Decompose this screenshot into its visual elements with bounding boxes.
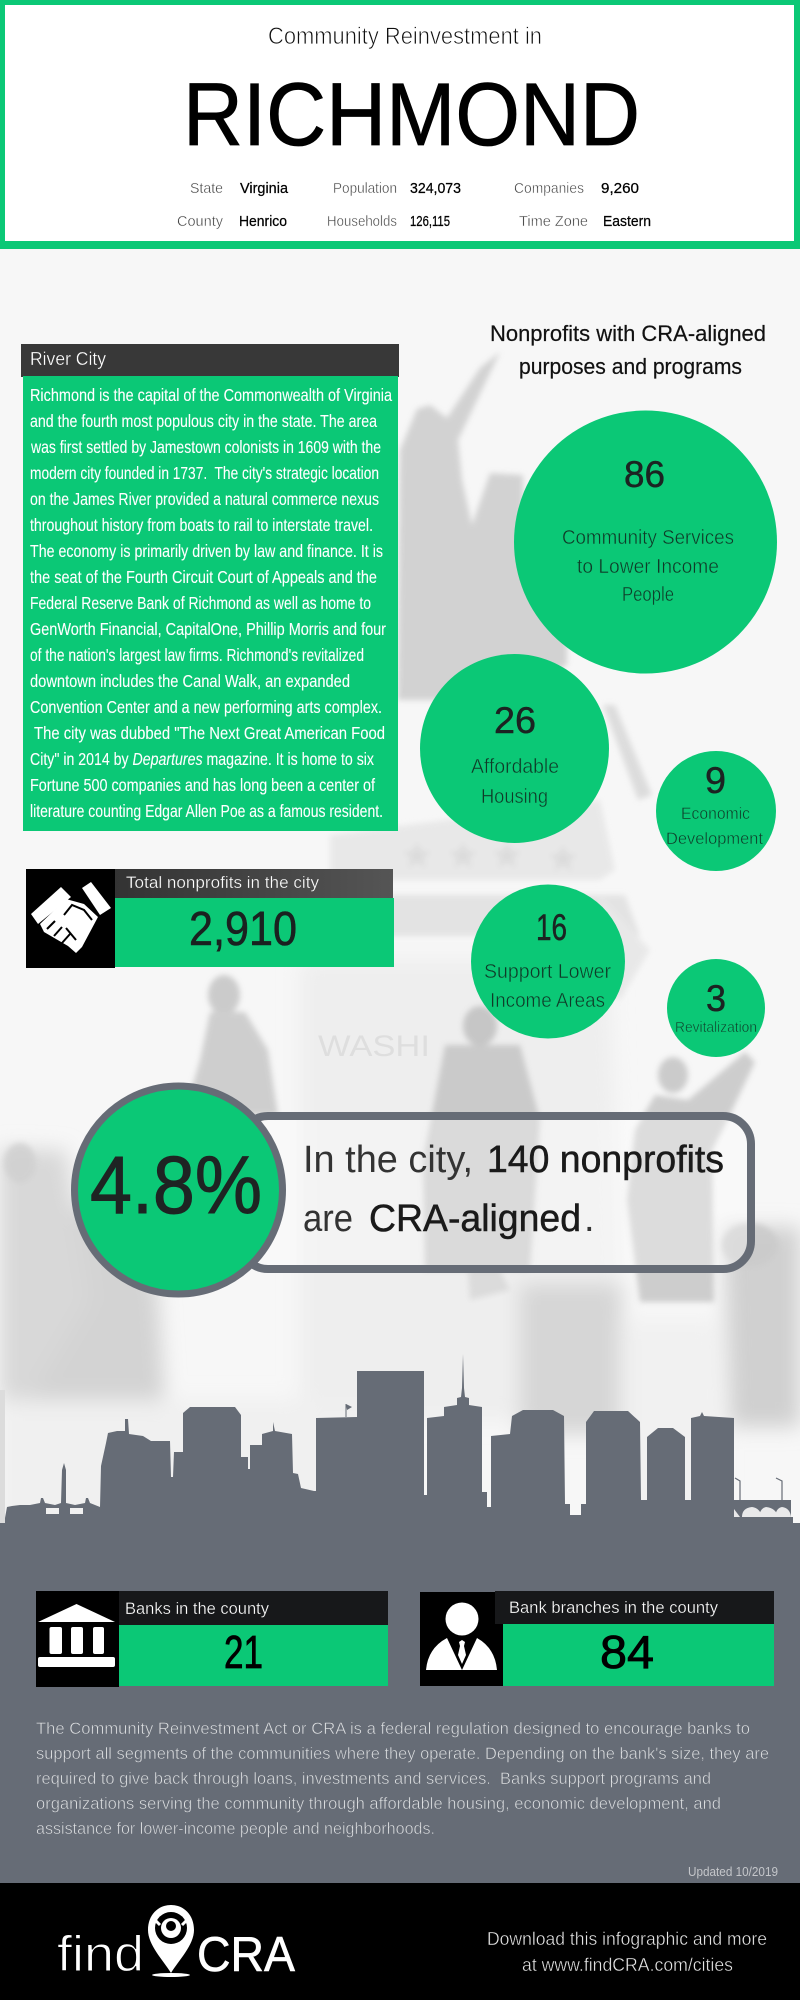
River City body text: The economy is primarily driven by law and finance. It is	[30, 541, 383, 561]
circle: community services: Community Services	[562, 527, 734, 549]
circle: revitalization: Revitalization	[675, 1019, 757, 1036]
stars	[403, 842, 577, 871]
callout text: In the city,	[303, 1139, 473, 1181]
bridge arches and colonnade	[46, 1507, 791, 1517]
background photo: monument statues: WASHI	[318, 1030, 430, 1063]
River City body text: modern city founded in 1737. The city's strategic location	[30, 463, 379, 483]
River City body text: Federal Reserve Bank of Richmond as well as home to	[30, 593, 371, 613]
city stats: 9,260	[601, 181, 639, 197]
River City body text: throughout history from boats to rail to interstate travel.	[30, 515, 373, 535]
text block: CRA explanation	[36, 1720, 769, 1838]
circle: economic development: 9	[705, 760, 726, 801]
heading: nonprofits: purposes and programs	[519, 354, 742, 379]
background photo: monument statues	[0, 249, 800, 1530]
left figure	[208, 975, 240, 1015]
text block: CRA explanation: The Community Reinvestment Act or CRA is a federal regulation designed to encourage banks to	[36, 1720, 750, 1738]
panel: bank branches in the county	[420, 1591, 774, 1686]
circle: economic development: Development	[666, 829, 763, 848]
callout: CRA-aligned share	[74, 1086, 751, 1294]
city stats: Henrico	[239, 214, 287, 230]
panel: River City	[21, 344, 399, 831]
subtitle: Community Reinvestment in	[268, 23, 542, 50]
title: RICHMOND	[183, 64, 640, 164]
logo: findCRA: CRA	[197, 1928, 295, 1982]
icon: businessperson	[426, 1602, 497, 1670]
circle: revitalization	[667, 959, 765, 1057]
stat: branches: 84	[600, 1626, 654, 1678]
River City body text: and the fourth most populous city in the state. The area	[30, 411, 377, 431]
icon: bank	[38, 1604, 115, 1667]
heading: nonprofits	[490, 321, 766, 379]
right figure	[658, 1057, 688, 1093]
River City body text: City" in 2014 by Departures magazine. It is home to six	[30, 749, 374, 769]
city stats: Time Zone	[519, 214, 588, 230]
icon: handshake	[31, 882, 111, 953]
logo: findCRA	[57, 1905, 295, 1982]
circle: support lower income areas: Support Lower	[484, 961, 611, 983]
River City body text	[30, 385, 392, 821]
rider and horse	[398, 352, 567, 700]
circle: community services: 86	[624, 454, 665, 495]
text block: CRA explanation: organizations serving the community through affordable housing, economic development, and	[36, 1795, 721, 1813]
circle: community services: People	[622, 584, 674, 606]
text block: CRA explanation: required to give back through loans, investments and services. Banks support programs and	[36, 1770, 711, 1788]
circle: affordable housing: Housing	[481, 786, 548, 808]
River City body text: downtown includes the Canal Walk, an expanded	[30, 671, 350, 691]
River City body text: on the James River provided a natural commerce nexus	[30, 489, 379, 509]
callout text	[303, 1139, 724, 1240]
city stats: 324,073	[410, 181, 461, 197]
circle: support lower income areas: Income Areas	[490, 990, 605, 1012]
skyline and lower grey panel	[0, 1354, 800, 1883]
circle: support lower income areas: 16	[536, 907, 567, 948]
circle: community services: to Lower Income	[577, 556, 719, 578]
callout text: CRA-aligned	[369, 1198, 581, 1240]
header panel	[0, 0, 800, 249]
circle: affordable housing: Affordable	[471, 756, 559, 778]
city stats: Eastern	[603, 214, 651, 230]
River City body text: the seat of the Fourth Circuit Court of Appeals and the	[30, 567, 377, 587]
city stats: Virginia	[240, 181, 289, 197]
city stats: 126,115	[410, 214, 450, 230]
circle: economic development	[656, 751, 776, 871]
city stats: Companies	[514, 181, 584, 197]
callout text: .	[584, 1198, 595, 1240]
panel: River City: River City	[30, 349, 106, 369]
River City body text: Fortune 500 companies and has long been a center of	[30, 775, 375, 795]
stat: banks: 21	[224, 1626, 263, 1678]
River City body text: Richmond is the capital of the Commonwealth of Virginia	[30, 385, 392, 405]
middle figure	[463, 1006, 497, 1046]
download note	[487, 1929, 767, 1975]
circle: affordable housing	[420, 654, 609, 843]
panel: total nonprofits	[26, 869, 394, 968]
circle: support lower income areas	[471, 884, 625, 1038]
update date: Updated 10/2019	[688, 1865, 778, 1879]
callout text: 140 nonprofits	[487, 1139, 724, 1181]
city stats	[177, 181, 651, 230]
heading: nonprofits: Nonprofits with CRA-aligned	[490, 321, 766, 346]
River City body text: was first settled by Jamestown colonists in 1609 with the	[30, 437, 381, 457]
circle: affordable housing: 26	[494, 700, 536, 741]
text block: CRA explanation: assistance for lower-income people and neighborhoods.	[36, 1820, 435, 1838]
circle: community services	[514, 410, 777, 674]
city stats: Households	[327, 214, 397, 230]
panel: banks in the county: Banks in the county	[125, 1599, 269, 1618]
River City body text: literature counting Edgar Allen Poe as a famous resident.	[30, 801, 383, 821]
River City body text: GenWorth Financial, CapitalOne, Phillip Morris and four	[30, 619, 386, 639]
text block: CRA explanation: support all segments of the communities where they operate. Depending on the bank's size, they are	[36, 1745, 769, 1763]
download note: at www.findCRA.com/cities	[522, 1955, 733, 1975]
circle: revitalization: 3	[706, 978, 726, 1019]
stat: 4.8%: 4.8%	[90, 1140, 262, 1231]
panel: bank branches in the county: Bank branches in the county	[509, 1598, 718, 1617]
panel: total nonprofits: Total nonprofits in the city	[126, 874, 320, 892]
city stats: Population	[333, 181, 397, 197]
download note: Download this infographic and more	[487, 1929, 767, 1949]
city stats: County	[177, 214, 224, 230]
footer	[0, 1883, 800, 2000]
icon: location pin	[148, 1905, 194, 1977]
panel: banks in the county	[36, 1591, 388, 1687]
callout text: are	[303, 1198, 353, 1240]
River City body text: Convention Center and a new performing arts complex.	[30, 697, 382, 717]
River City body text: of the nation's largest law firms. Richmond's revitalized	[30, 645, 364, 665]
River City body text: The city was dubbed "The Next Great American Food	[34, 723, 385, 743]
circle: economic development: Economic	[681, 804, 750, 823]
city stats: State	[190, 181, 223, 197]
logo: findCRA: find	[57, 1926, 144, 1982]
stat: total nonprofits: 2,910	[189, 903, 297, 956]
